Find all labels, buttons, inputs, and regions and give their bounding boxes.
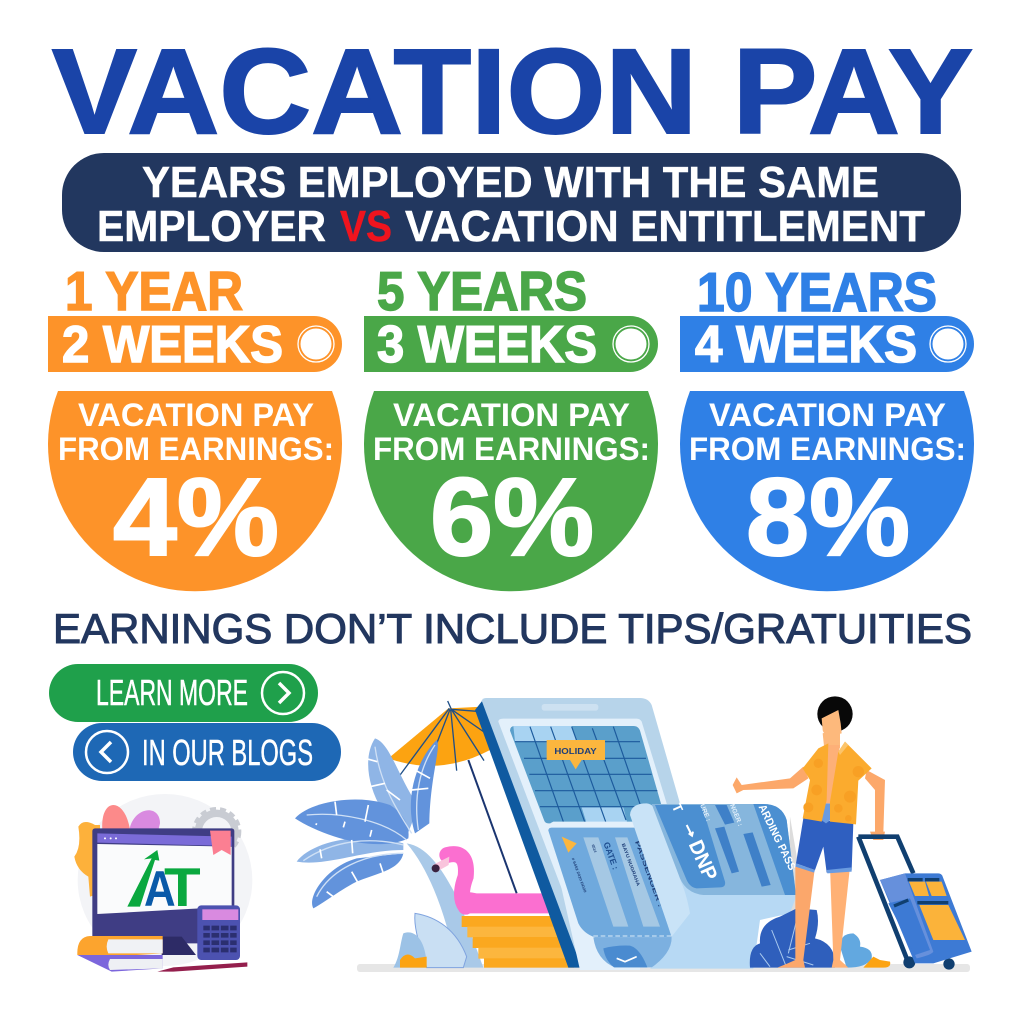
subtitle banner: VS: [340, 202, 392, 251]
boarding pass: URE :: [698, 803, 711, 823]
holiday tag: [547, 740, 605, 769]
panel: 5 years: FROM EARNINGS:: [373, 431, 650, 467]
button: learn more: LEARN MORE: [96, 672, 248, 713]
illustration: plants, traveller and suitcase: [733, 696, 972, 970]
panel: 10 years: [680, 261, 974, 591]
panel: 5 years: 3 WEEKS: [377, 316, 597, 374]
panel: 10 years: VACATION PAY: [709, 397, 946, 433]
button: learn more: [49, 664, 318, 722]
panel: 10 years: 4 WEEKS: [695, 316, 917, 374]
earnings note: EARNINGS DON’T INCLUDE TIPS/GRATUITIES: [53, 605, 972, 652]
traveller: [733, 696, 885, 968]
icon: company logo on monitor: T: [164, 856, 201, 918]
boarding pass: ARDING PASS: [756, 803, 798, 872]
ground shadow: [357, 964, 970, 972]
panel: 5 years: [364, 260, 658, 591]
boarding pass: 6514: [591, 844, 598, 854]
icon: company logo on monitor: A: [144, 861, 176, 917]
suitcase: [858, 837, 972, 970]
subtitle banner: VACATION ENTITLEMENT: [405, 202, 925, 251]
boarding pass: NGER :: [728, 803, 743, 827]
panel: 1 year: VACATION PAY: [78, 397, 314, 433]
phone calendar: [510, 704, 667, 823]
illustration: palm, umbrella, flamingo: [295, 698, 680, 968]
boarding pass: [548, 801, 803, 970]
panel: 5 years: VACATION PAY: [393, 397, 630, 433]
button: in our blogs: IN OUR BLOGS: [142, 732, 313, 773]
flamingo float: [432, 854, 548, 913]
subtitle banner: EMPLOYER: [97, 202, 326, 251]
phone side and body: [475, 698, 680, 968]
subtitle banner: [62, 153, 961, 252]
boarding pass: GATE :: [601, 841, 621, 871]
plants: [750, 908, 890, 968]
boarding pass: DNP: [684, 837, 722, 884]
title: VACATION PAY: [52, 23, 973, 159]
panel: 1 year: 4%: [113, 456, 279, 579]
palm tree: [295, 738, 483, 968]
boarding pass: BAYU NUGRAHA: [621, 843, 641, 887]
boarding pass: # 6452 2020 DD20: [571, 857, 587, 893]
coin stack: [462, 916, 574, 968]
button: in our blogs: [73, 723, 341, 781]
panel: 10 years: 10 YEARS: [697, 261, 937, 323]
panel: 1 year: 1 YEAR: [65, 260, 243, 322]
icon: company logo on monitor: [74, 794, 252, 972]
subtitle banner: YEARS EMPLOYED WITH THE SAME: [142, 158, 879, 207]
panel: 5 years: 5 YEARS: [377, 260, 587, 322]
umbrella: [388, 701, 517, 893]
panel: 10 years: FROM EARNINGS:: [689, 431, 966, 467]
holiday tag: HOLIDAY: [554, 746, 597, 756]
boarding pass: T: [669, 801, 686, 815]
boarding pass: PASSENGER :: [633, 840, 664, 908]
panel: 10 years: 8%: [746, 456, 910, 579]
panel: 1 year: 2 WEEKS: [62, 316, 283, 374]
panel: 5 years: 6%: [430, 456, 594, 579]
panel: 1 year: [48, 260, 342, 591]
panel: 1 year: FROM EARNINGS:: [58, 431, 334, 467]
